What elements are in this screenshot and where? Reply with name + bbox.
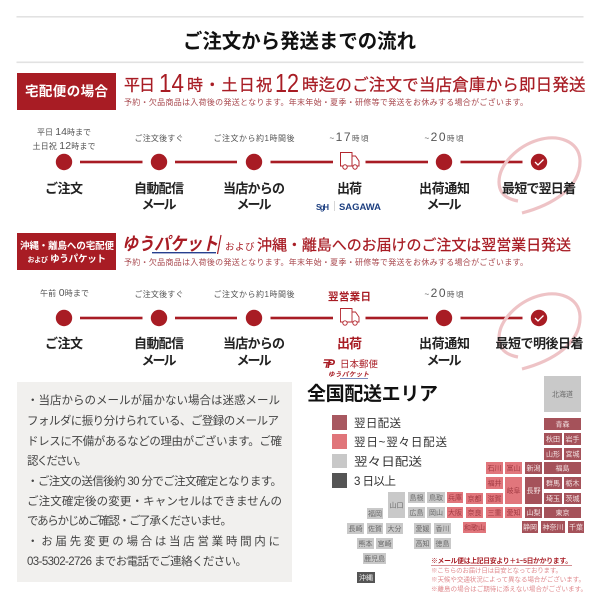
note: holidays row 1: 予約・欠品商品は入荷後の発送となります。年末年始・夏季・研修等で発送をお休みする場合がございます。 [124, 97, 528, 107]
legend: 翌日配送 [354, 416, 402, 430]
logo: SAGAWA: SgH [316, 203, 329, 212]
step 1: order [40, 287, 89, 351]
panel: notes: ご注文確定後の変更・キャンセルはできませんの [27, 494, 282, 508]
badge: home delivery [17, 73, 116, 110]
logo: Japan Post: ゆうパケット [328, 370, 370, 378]
step 1: order: 土日祝 12時まで [32, 140, 96, 152]
step 6: next-day arrival [502, 154, 576, 196]
timeline connectors row 1 [80, 161, 522, 163]
panel: notes: 認ください。 [27, 454, 87, 468]
title: ご注文から発送までの流れ [183, 29, 416, 53]
region: Chugoku, Shikoku and Kyushu: 愛媛 [416, 524, 430, 533]
step 1: order [32, 126, 96, 196]
heading: same-day shipping: 12 [275, 68, 299, 98]
step 3: shop mail: ご注文から約1時間後 [214, 133, 294, 143]
region: Tohoku and Kanto: 神奈川 [542, 522, 564, 532]
step 5: shipping notice: ~20時頃 [424, 286, 464, 300]
step 5: shipping notice: 出荷通知 [419, 336, 470, 351]
step 3: shop mail: メール [236, 197, 272, 212]
logo: Japan Post: 〒P [320, 357, 336, 371]
step 3: shop mail: メール [236, 353, 272, 368]
legend: 翌々日配送 [354, 454, 423, 468]
region: Tohoku and Kanto: 秋田 [546, 434, 560, 444]
region: Chugoku, Shikoku and Kyushu: 香川 [436, 524, 450, 533]
region: Tohoku and Kanto [522, 418, 584, 533]
region: Chugoku, Shikoku and Kyushu [347, 492, 451, 564]
step 1: order: 午前 0時まで [40, 287, 89, 299]
delivery notes [431, 556, 587, 593]
step 6: arrival in two days [496, 310, 584, 351]
heading: next business day: および [225, 242, 255, 253]
map heading: 全国配送エリア [307, 383, 438, 405]
region: Chubu and Kansai: 富山 [506, 464, 520, 472]
region: Tohoku and Kanto: 群馬 [546, 478, 560, 488]
step 4: shipping: ~17時頃 [330, 130, 369, 144]
region: Chugoku, Shikoku and Kyushu: 徳島 [436, 539, 450, 548]
step 3: shop mail [214, 133, 294, 212]
step 5: shipping notice [419, 130, 470, 212]
badge: home delivery: 宅配便の場合 [25, 83, 108, 99]
panel: notes: ドレスに不備があるなどの理由がございます。ご確 [27, 434, 282, 448]
step 6: arrival in two days: 最短で明後日着 [496, 336, 584, 351]
icon: truck [340, 308, 359, 325]
step 2: auto mail: メール [142, 353, 176, 368]
note: holidays row 2: 予約・欠品商品は入荷後の発送となります。年末年始・夏季・研修等で発送をお休みする場合がございます。 [124, 257, 528, 267]
badge: Okinawa and islands: および ゆうパケット [28, 254, 106, 265]
delivery notes: ※天候や交通状況によって異なる場合がございます。 [431, 574, 585, 584]
region: Chubu and Kansai: 石川 [488, 464, 502, 472]
region: Tohoku and Kanto: 青森 [556, 420, 570, 428]
highlight ring row 1 [499, 138, 580, 213]
logo: Japan Post: 日本郵便 [340, 358, 378, 370]
region: Tohoku and Kanto: 新潟 [526, 464, 540, 472]
logo: SAGAWA [316, 201, 382, 212]
delivery notes: ※こちらのお届け日は目安となっております。 [431, 566, 562, 574]
region: Chugoku, Shikoku and Kyushu: 広島 [410, 508, 424, 517]
region: Chubu and Kansai: 愛知 [506, 508, 520, 517]
step 1: order: 平日 14時まで [37, 126, 91, 138]
step 3: shop mail: 当店からの [223, 181, 285, 196]
region: Chubu and Kansai: 京都 [468, 495, 482, 503]
region: Chugoku, Shikoku and Kyushu: 宮崎 [378, 539, 392, 548]
step 3: shop mail [214, 289, 294, 368]
panel: notes: ・当店からのメールが届かない場合は迷惑メール [27, 393, 280, 407]
region: Chugoku, Shikoku and Kyushu: 高知 [416, 539, 430, 548]
timeline connectors row 2 [80, 317, 522, 319]
step 4: shipping: 出荷 [337, 336, 362, 351]
logo: SAGAWA: SAGAWA [339, 202, 382, 212]
step 2: auto mail: 自動配信 [134, 181, 184, 196]
step 5: shipping notice [419, 286, 470, 368]
panel: notes: 03-5302-2726 までお電話でご連絡ください。 [27, 554, 247, 568]
heading: same-day shipping: 時迄のご注文で当店倉庫から即日発送 [302, 76, 586, 94]
heading: same-day shipping [124, 68, 586, 98]
region: Chugoku, Shikoku and Kyushu: 山口 [390, 502, 404, 510]
region: Chugoku, Shikoku and Kyushu: 鳥取 [429, 493, 443, 502]
step 5: shipping notice: メール [426, 197, 462, 212]
region: Tohoku and Kanto: 東京 [556, 508, 570, 517]
region: Chubu and Kansai: 奈良 [468, 508, 482, 517]
panel: notes: ・ご注文の送信後約 30 分でご注文確定となります。 [27, 474, 282, 488]
heading: same-day shipping: 14 [159, 68, 184, 98]
region: Tohoku and Kanto: 栃木 [566, 478, 580, 488]
region: Okinawa [357, 572, 375, 583]
region: Tohoku and Kanto: 宮城 [566, 450, 580, 458]
panel: notes: フォルダに振り分けられている、ご登録のメールア [27, 414, 279, 428]
heading: same-day shipping: 時・土日祝 [187, 76, 272, 94]
icon: truck [340, 152, 359, 169]
panel: notes [17, 382, 292, 582]
step 2: auto mail: ご注文後すぐ [134, 289, 184, 299]
badge: Okinawa and islands [17, 233, 116, 270]
step 2: auto mail [134, 289, 184, 368]
region: Tohoku and Kanto: 静岡 [523, 522, 537, 532]
region: Chubu and Kansai: 三重 [488, 509, 502, 517]
region: Chugoku, Shikoku and Kyushu: 福岡 [368, 509, 382, 518]
delivery notes: ※メール便は上記日安より＋1~5日かかります。 [431, 556, 572, 565]
map: Japan prefectures [347, 376, 584, 583]
heading: same-day shipping: 平日 [124, 78, 155, 94]
step 4: shipping [320, 290, 378, 379]
step 1: order: ご注文 [45, 336, 83, 351]
panel: notes: であらかじめご確認・ご了承くださいませ。 [27, 514, 232, 528]
step 4: shipping: 出荷 [337, 181, 362, 196]
step 4: shipping [316, 130, 382, 212]
region: Tohoku and Kanto: 山梨 [526, 508, 540, 517]
region: Tohoku and Kanto: 長野 [526, 487, 540, 495]
region: Chubu and Kansai: 岐阜 [506, 486, 520, 495]
region: Tohoku and Kanto: 山形 [546, 450, 560, 458]
region: Chugoku, Shikoku and Kyushu: 熊本 [358, 539, 372, 548]
region: Chubu and Kansai: 福井 [488, 478, 502, 488]
legend: 3 日以上 [354, 475, 396, 488]
step 3: shop mail: ご注文から約1時間後 [214, 289, 294, 299]
step 6: next-day arrival: 最短で翌日着 [502, 181, 576, 196]
region: Tohoku and Kanto: 岩手 [566, 434, 580, 444]
legend [332, 415, 448, 488]
region: Chubu and Kansai: 大阪 [448, 508, 462, 517]
logo: Yu-Packet: ゆうパケット [122, 234, 218, 254]
logo: Japan Post [320, 357, 378, 379]
region: Okinawa: 沖縄 [359, 573, 373, 582]
region: Chubu and Kansai: 和歌山 [464, 523, 485, 532]
region: Tohoku and Kanto: 千葉 [569, 522, 583, 532]
region: Chubu and Kansai: 滋賀 [488, 494, 502, 503]
region: Tohoku and Kanto: 茨城 [566, 494, 580, 503]
step 3: shop mail: 当店からの [223, 336, 285, 351]
step 2: auto mail: ご注文後すぐ [134, 133, 184, 143]
region: Chugoku, Shikoku and Kyushu: 佐賀 [368, 524, 382, 533]
panel: notes: ・お届先変更の場合は当店営業時間内に [27, 534, 280, 548]
heading: next business day: 沖縄・離島へのお届けのご注文は翌営業日発送 [257, 237, 571, 254]
step 2: auto mail: 自動配信 [134, 336, 184, 351]
region: Chugoku, Shikoku and Kyushu: 島根 [410, 493, 424, 502]
region: Hokkaido [544, 376, 581, 412]
step 2: auto mail: メール [142, 197, 176, 212]
step 4: shipping: 翌営業日 [328, 290, 371, 303]
region: Chugoku, Shikoku and Kyushu: 長崎 [348, 524, 362, 533]
highlight ring row 2 [499, 294, 580, 369]
region: Chubu and Kansai [447, 462, 522, 533]
legend: 翌日~翌々日配送 [354, 435, 448, 449]
delivery notes: ※離島の場合はご期待に添えない場合がございます。 [431, 584, 587, 593]
region: Chugoku, Shikoku and Kyushu: 岡山 [429, 509, 443, 517]
badge: Okinawa and islands: 沖縄・離島への宅配便 [20, 240, 114, 252]
step 2: auto mail [134, 133, 184, 212]
step 5: shipping notice: メール [426, 353, 462, 368]
region: Chubu and Kansai: 兵庫 [448, 493, 462, 502]
region: Chugoku, Shikoku and Kyushu: 鹿児島 [364, 554, 385, 563]
step 5: shipping notice: ~20時頃 [424, 130, 464, 144]
region: Tohoku and Kanto: 埼玉 [546, 494, 560, 503]
region: Tohoku and Kanto: 福島 [556, 464, 570, 472]
region: Hokkaido: 北海道 [552, 390, 573, 398]
region: Chugoku, Shikoku and Kyushu: 大分 [388, 524, 402, 533]
step 1: order: ご注文 [45, 181, 83, 196]
step 5: shipping notice: 出荷通知 [419, 181, 470, 196]
